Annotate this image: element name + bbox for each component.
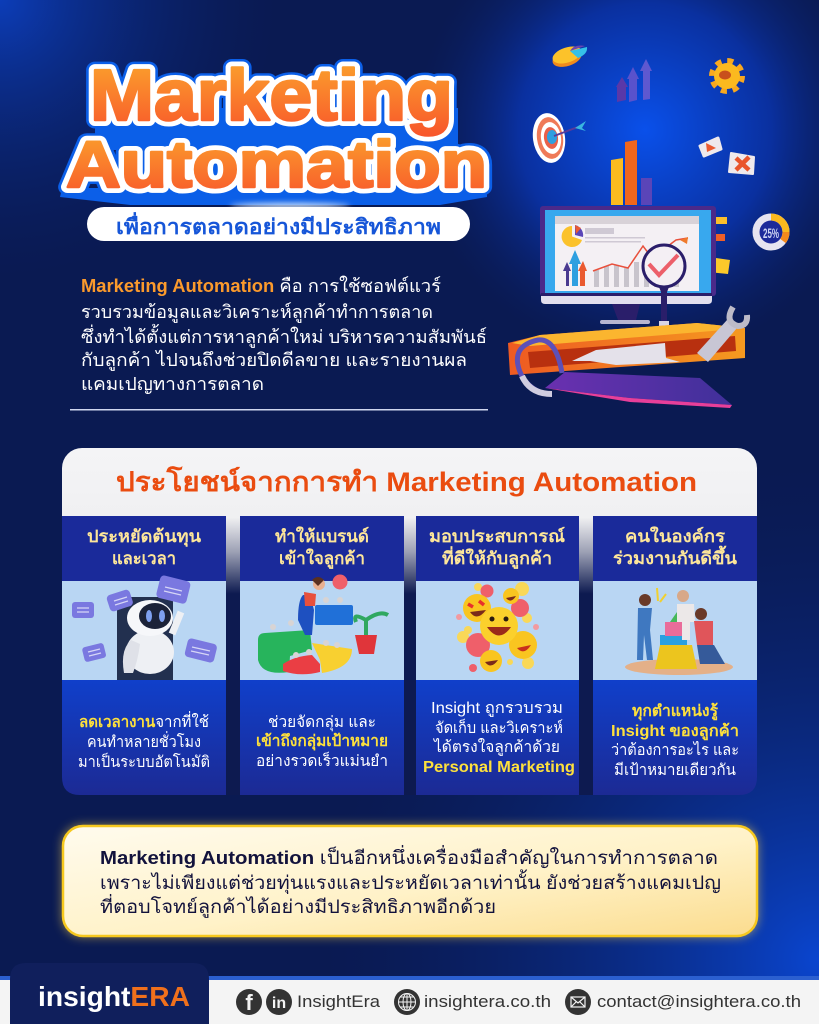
- icon: linkedin: [266, 989, 292, 1015]
- callout: [62, 825, 758, 937]
- icon: mail: [565, 989, 591, 1015]
- card 3 text: จัดเก็บ และวิเคราะห์: [435, 718, 563, 737]
- contact: email: contact@insightera.co.th: [597, 992, 801, 1011]
- card 2: [240, 516, 404, 795]
- card 3 title: มอบประสบการณ์: [429, 526, 565, 546]
- icon: 25% donut: [756, 217, 786, 247]
- title word: Automation: Automation: [66, 127, 487, 201]
- card 1 title: ประหยัดต้นทุน: [87, 527, 201, 547]
- subtitle pill: [87, 203, 470, 241]
- callout: ที่ตอบโจทย์ลูกค้าได้อย่างมีประสิทธิภาพอีกด้วย: [100, 894, 496, 918]
- card 1: [62, 516, 226, 795]
- icon: facebook: f: [245, 990, 253, 1015]
- icon: facebook: [236, 989, 262, 1015]
- card 2 text: เข้าถึงกลุ่มเป้าหมาย: [256, 732, 388, 751]
- icon: 25% donut: 25%: [763, 225, 779, 241]
- card 4: [593, 516, 757, 795]
- icon: wrench: [697, 307, 747, 362]
- title word: Marketing: Marketing: [90, 56, 453, 136]
- card 2 title: ทำให้แบรนด์: [275, 526, 369, 546]
- card 1 text: ลดเวลางานจากที่ใช้: [79, 711, 209, 731]
- callout: เพราะไม่เพียงแต่ช่วยทุ่นแรงและประหยัดเวลาเท่านั้น ยังช่วยสร้างแคมเปญ: [100, 869, 721, 895]
- subtitle pill: เพื่อการตลาดอย่างมีประสิทธิภาพ: [116, 211, 441, 239]
- title word: Automation: Automation: [66, 127, 487, 201]
- title word: Marketing: Marketing: [90, 56, 453, 136]
- icon: team building blocks: [625, 588, 733, 675]
- icon: play card: [700, 138, 721, 156]
- contact: website: insightera.co.th: [424, 992, 551, 1011]
- description text: ซึ่งทำได้ตั้งแต่การหาลูกค้าใหม่ บริหารความสัมพันธ์: [81, 324, 487, 348]
- icon: gear: [712, 61, 742, 91]
- card 2 title: [275, 526, 369, 570]
- title word: Marketing: Marketing: [90, 56, 453, 136]
- icon: linkedin: in: [272, 995, 286, 1012]
- icon: target with dart: [530, 111, 586, 165]
- card 3 title: [429, 526, 565, 570]
- card 1 text: คนทำหลายชั่วโมง: [87, 731, 201, 751]
- illustration: marketing desk: [508, 43, 786, 408]
- card 2 text: ช่วยจัดกลุ่ม และ: [268, 714, 376, 732]
- icon: shelf: [508, 323, 745, 375]
- icon: pie chart: [550, 43, 587, 70]
- card 2 text: อย่างรวดเร็วแม่นยำ: [256, 751, 388, 770]
- description text: รวบรวมข้อมูลและวิเคราะห์ลูกค้าทำการตลาด: [81, 302, 433, 323]
- card 3 text: Insight ถูกรวบรวม: [431, 700, 563, 718]
- card 4 title: ร่วมงานกันดีขึ้น: [613, 545, 737, 568]
- card 3 text: ได้ตรงใจลูกค้าด้วย: [432, 738, 560, 757]
- card 4 title: คนในองค์กร: [625, 526, 726, 546]
- title word: Automation: Automation: [66, 127, 487, 201]
- card 4 text: ทุกตำแหน่งรู้: [632, 702, 719, 722]
- icon: growth arrows: [616, 59, 652, 102]
- icon: keyboard: [545, 372, 732, 408]
- card 1 text: มาเป็นระบบอัตโนมัติ: [78, 752, 210, 771]
- icon: globe: [394, 989, 420, 1015]
- callout: Marketing Automation เป็นอีกหนึ่งเครื่องมือสำคัญในการทำการตลาด: [100, 845, 718, 869]
- heading: benefits: ประโยชน์จากการทำ Marketing Automation: [116, 465, 697, 497]
- icon: close card: [729, 153, 754, 174]
- footer: [0, 963, 819, 1024]
- icon: emoji cluster: [456, 582, 539, 672]
- icon: bars: [611, 140, 652, 205]
- card 4 text: Insight ของลูกค้า: [611, 722, 739, 742]
- card 4 title: [613, 526, 737, 568]
- panel: benefits: [62, 448, 757, 795]
- icon: magnifier: [643, 245, 685, 327]
- contact: InsightEra: InsightEra: [297, 992, 381, 1011]
- description text: กับลูกค้า ไปจนถึงช่วยปิดดีลขาย และรายงานผล: [81, 349, 467, 371]
- card 4 text: มีเป้าหมายเดียวกัน: [614, 762, 736, 779]
- icon: robot assistant: [72, 575, 218, 680]
- card 2 text: [256, 714, 388, 770]
- card 1 title: และเวลา: [112, 549, 176, 568]
- card 3 text: [423, 700, 575, 776]
- description text: [81, 275, 487, 394]
- icon: headset: [517, 340, 562, 394]
- icon: monitor: [540, 206, 716, 324]
- description text: Marketing Automation คือ การใช้ซอฟต์แวร์: [81, 275, 441, 296]
- icon: side tags: [707, 217, 730, 274]
- title: [60, 56, 487, 205]
- title blue backing shape: [60, 108, 487, 205]
- card 3 text: Personal Marketing: [423, 759, 575, 776]
- card 3 title: ที่ดีให้กับลูกค้า: [442, 546, 552, 570]
- card 1 text: [78, 711, 210, 771]
- card 3: [416, 516, 579, 795]
- logo block: [10, 963, 209, 1024]
- card 4 text: ว่าต้องการอะไร และ: [611, 741, 739, 759]
- icon: segment blocks and figure: [258, 574, 388, 674]
- description text: แคมเปญทางการตลาด: [81, 374, 264, 394]
- card 4 text: [611, 702, 739, 779]
- card 2 title: เข้าใจลูกค้า: [279, 548, 365, 570]
- card 1 title: [87, 527, 201, 568]
- logo block: insightERA: [38, 981, 190, 1012]
